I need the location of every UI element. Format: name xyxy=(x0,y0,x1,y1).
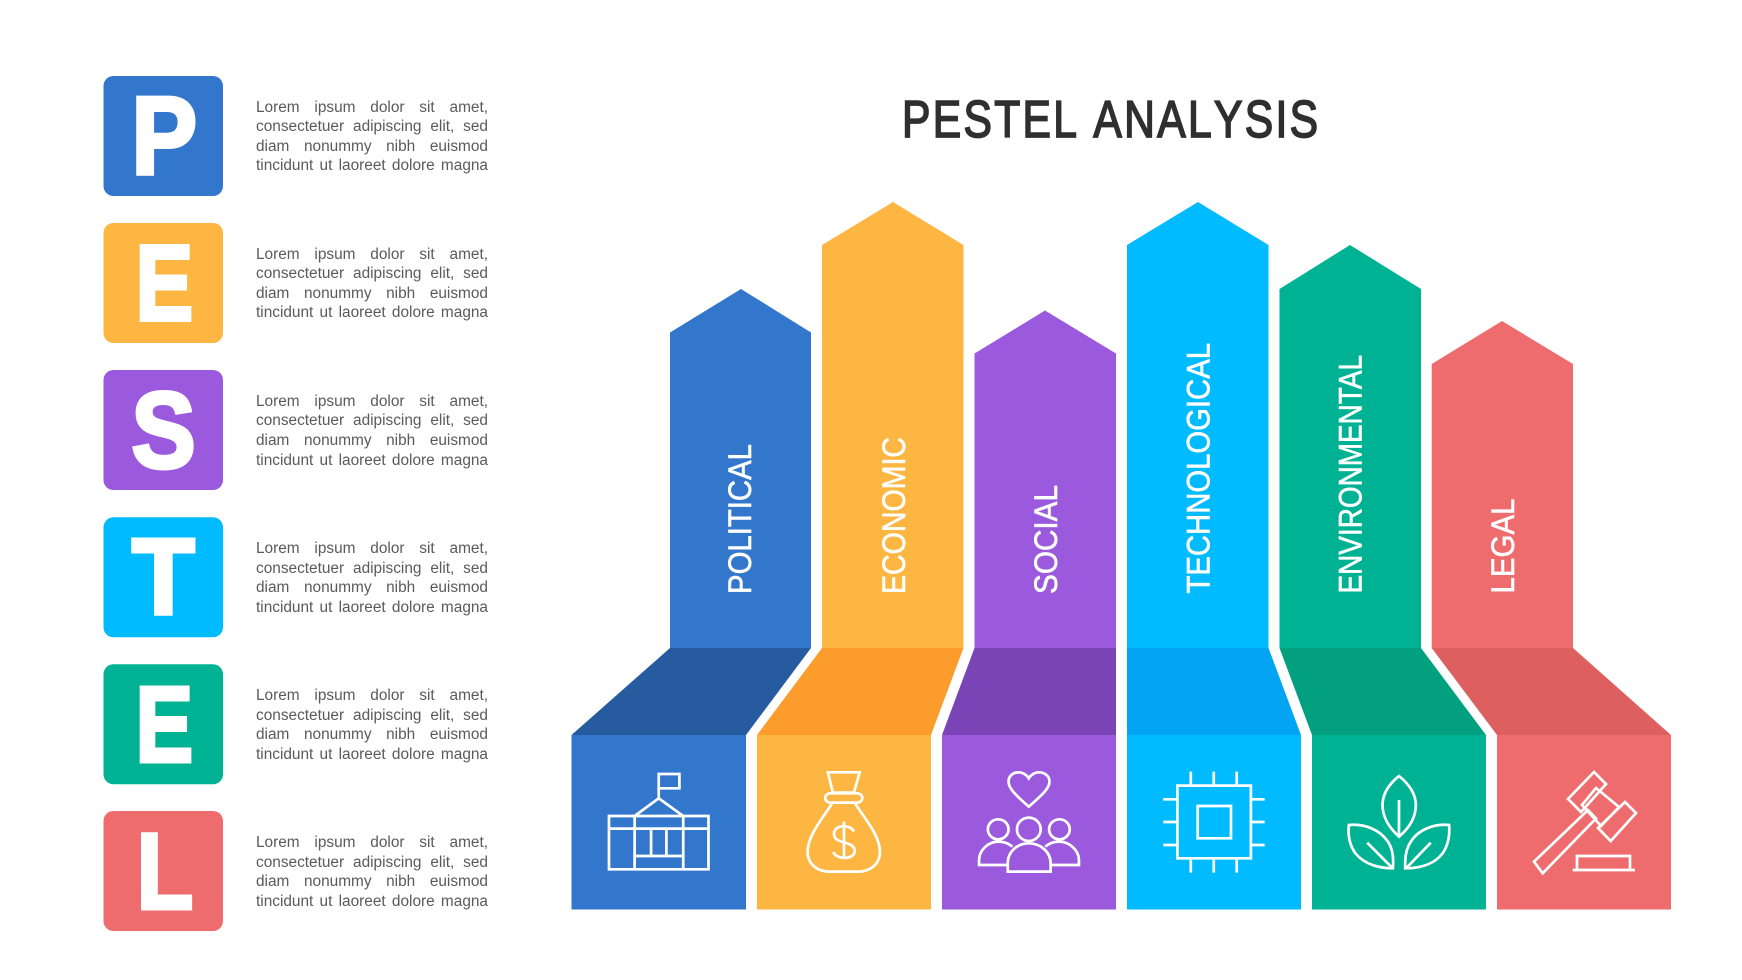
title: PESTEL ANALYSIS xyxy=(902,91,1320,149)
text block: environmental: Lorem ipsum dolor sit amet, xyxy=(256,687,488,704)
text block: technological: Lorem ipsum dolor sit amet, xyxy=(256,540,488,557)
text block: social: tincidunt ut laoreet dolore magna xyxy=(256,452,488,469)
text block: environmental: tincidunt ut laoreet dolore magna xyxy=(256,746,488,763)
tile: E environmental: E xyxy=(136,663,193,784)
text block: economic: tincidunt ut laoreet dolore magna xyxy=(256,304,488,321)
tile: T xyxy=(104,517,223,637)
label: legal: LEGAL xyxy=(1485,498,1521,594)
icon: microchip xyxy=(1163,772,1265,873)
tile: E environmental xyxy=(104,663,223,784)
label: economic: ECONOMIC xyxy=(876,437,912,594)
text block: environmental xyxy=(256,687,488,763)
tile: E economic xyxy=(104,222,223,343)
text block: economic: Lorem ipsum dolor sit amet, xyxy=(256,246,488,263)
tile: S xyxy=(104,369,223,491)
text block: economic: diam nonummy nibh euismod xyxy=(256,285,488,302)
text block: technological: consectetuer adipiscing elit, sed xyxy=(256,560,488,577)
text block: technological xyxy=(256,540,488,616)
tile: L xyxy=(104,811,223,932)
column: technological xyxy=(1127,202,1301,910)
text block: political: diam nonummy nibh euismod xyxy=(256,138,488,155)
text block: legal xyxy=(256,834,488,910)
icon: gavel xyxy=(1534,772,1636,873)
text block: environmental: diam nonummy nibh euismod xyxy=(256,726,488,743)
text block: legal: diam nonummy nibh euismod xyxy=(256,873,488,890)
icon: leaves xyxy=(1349,776,1449,868)
text block: political: tincidunt ut laoreet dolore magna xyxy=(256,157,488,174)
text block: technological: tincidunt ut laoreet dolore magna xyxy=(256,599,488,616)
text block: economic: consectetuer adipiscing elit, sed xyxy=(256,265,488,282)
icon: government building xyxy=(609,774,708,869)
text block: political xyxy=(256,99,488,174)
tile: P: P xyxy=(132,76,197,198)
text block: social xyxy=(256,393,488,469)
text block: legal: consectetuer adipiscing elit, sed xyxy=(256,854,488,871)
text block: legal: Lorem ipsum dolor sit amet, xyxy=(256,834,488,851)
label: social: SOCIAL xyxy=(1028,485,1064,594)
tile: E economic: E xyxy=(136,222,193,343)
column: legal xyxy=(1432,321,1671,910)
icon: community with heart xyxy=(979,772,1079,872)
label: technological: TECHNOLOGICAL xyxy=(1180,343,1216,594)
text block: legal: tincidunt ut laoreet dolore magna xyxy=(256,893,488,910)
text block: technological: diam nonummy nibh euismod xyxy=(256,579,488,596)
text block: economic xyxy=(256,246,488,321)
icon: money bag xyxy=(808,772,880,872)
text block: social: diam nonummy nibh euismod xyxy=(256,432,488,449)
label: political: POLITICAL xyxy=(722,444,758,594)
column: social xyxy=(942,310,1116,910)
column: economic xyxy=(757,202,964,910)
column: environmental xyxy=(1280,245,1486,910)
text block: social: Lorem ipsum dolor sit amet, xyxy=(256,393,488,410)
label: environmental: ENVIRONMENTAL xyxy=(1333,355,1369,594)
tile: T: T xyxy=(132,517,195,637)
text block: social: consectetuer adipiscing elit, sed xyxy=(256,412,488,429)
tile: P xyxy=(104,76,223,198)
tile: L: L xyxy=(136,812,193,932)
text block: environmental: consectetuer adipiscing elit, sed xyxy=(256,707,488,724)
text block: political: Lorem ipsum dolor sit amet, xyxy=(256,99,488,116)
text block: political: consectetuer adipiscing elit, sed xyxy=(256,118,488,135)
column: political xyxy=(572,289,811,910)
tile: S: S xyxy=(132,369,196,491)
